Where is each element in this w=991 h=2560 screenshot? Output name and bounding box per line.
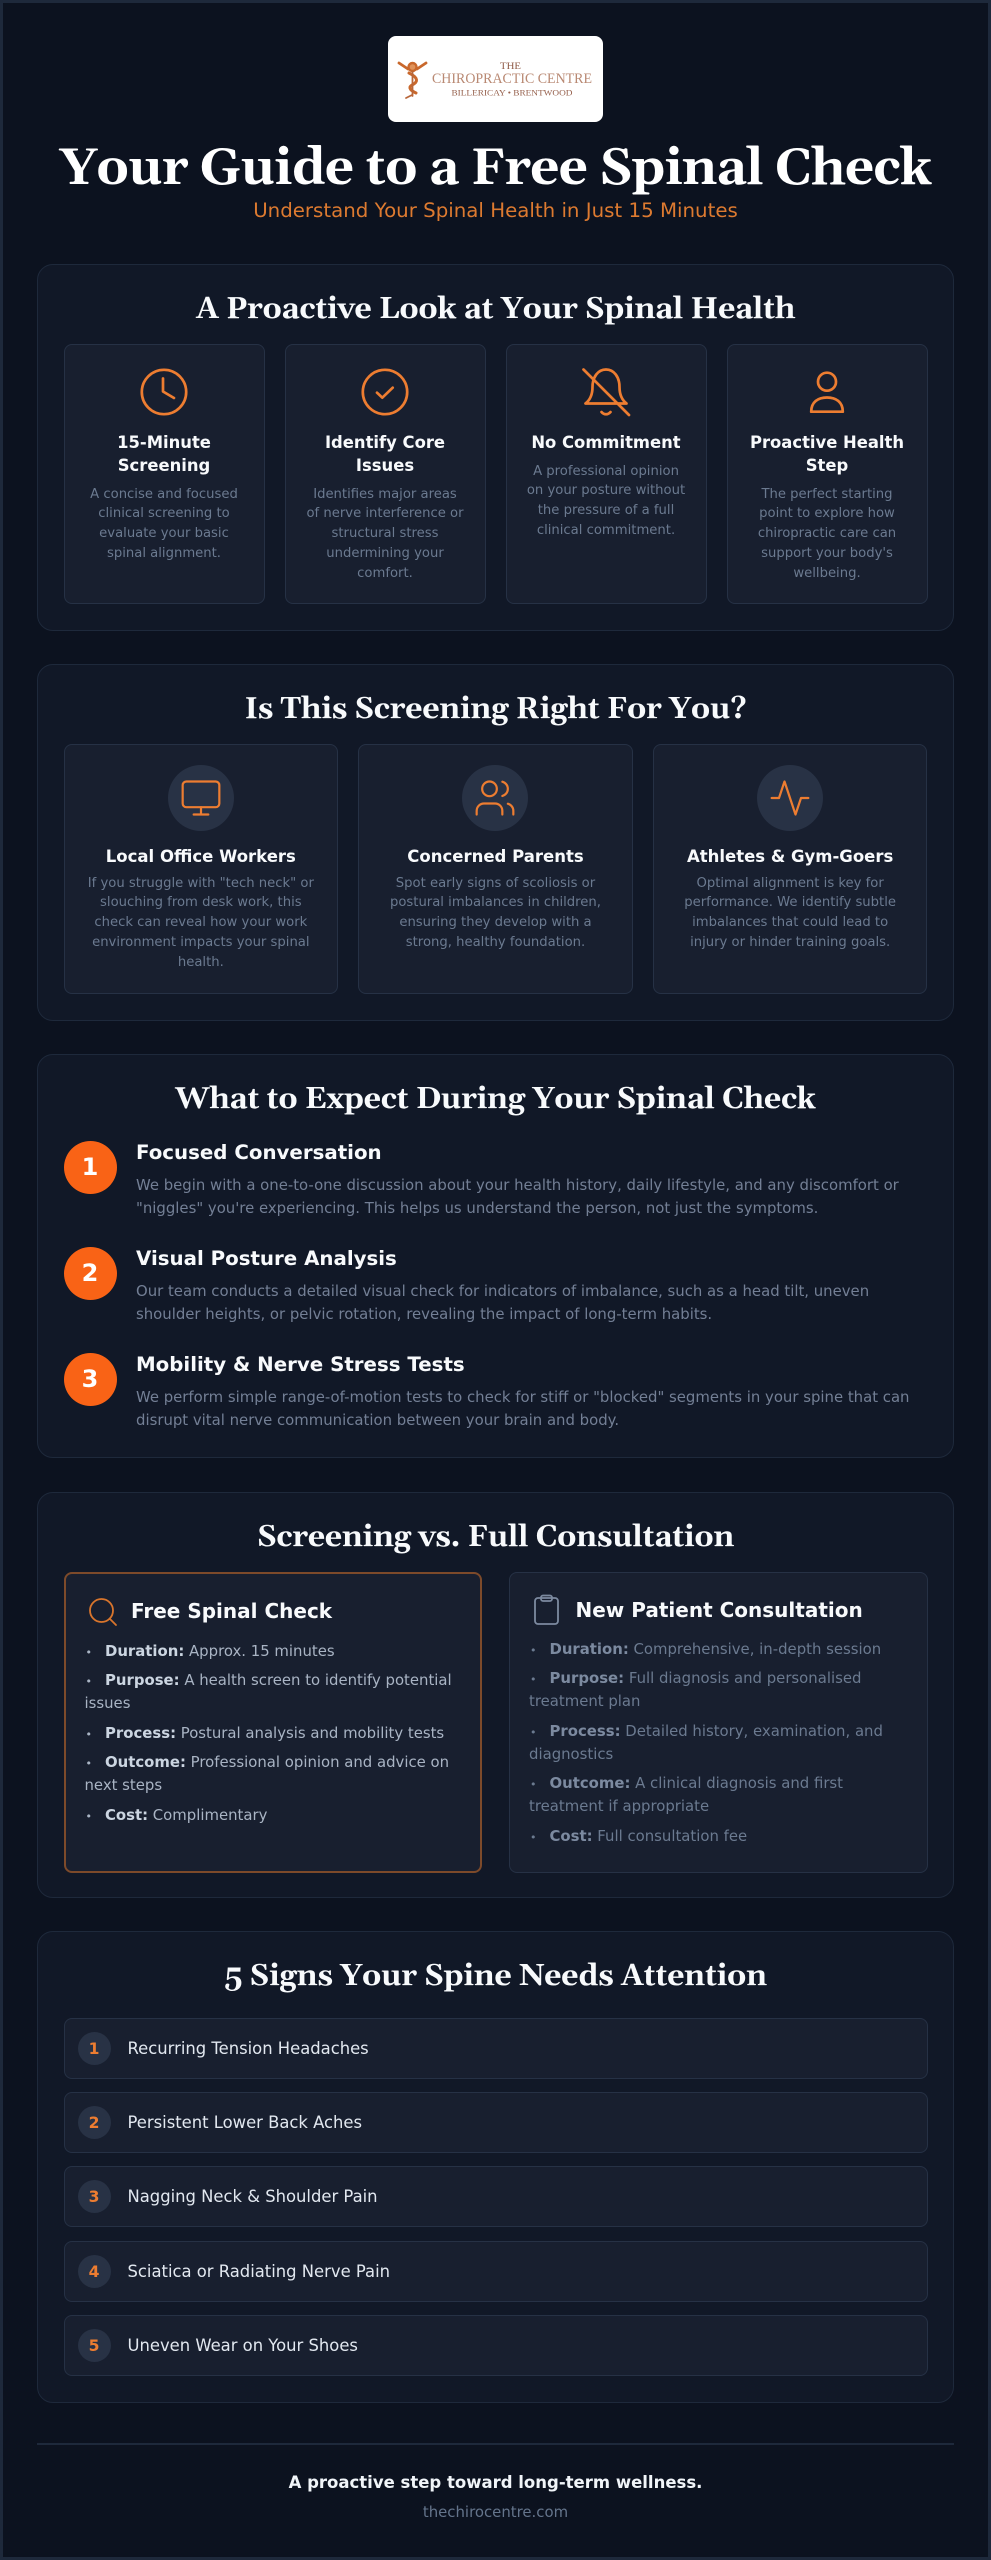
card: athletes and gym-goers [653,744,927,994]
card: concerned parents [358,744,633,994]
step 2: 2 [82,1259,98,1287]
card: no commitment: the pressure of a full [538,503,674,518]
comparison columns [64,1572,928,1873]
column: free spinal check: Process: Postural analysis and mobility tests [105,1724,444,1742]
icon: bell off [582,368,630,416]
card: 15-minute screening: 15-Minute [117,433,211,452]
card: identify core issues: of nerve interference or [306,506,464,521]
card: identify core issues: undermining your [326,546,444,561]
panel: screening vs consultation [37,1492,954,1898]
feature cards [64,344,928,604]
column: new patient consultation: Purpose: Full diagnosis and personalised [550,1669,861,1687]
panel: 5 signs [37,1931,954,2403]
icon: check circle [361,368,409,416]
heading: A Proactive Look at Your Spinal Health [196,291,795,329]
icon: clock [140,368,188,416]
sign 5 [64,2315,928,2376]
logo [388,36,603,122]
card: 15-minute screening: A concise and focused [90,486,238,502]
column: free spinal check: Purpose: A health screen to identify potential [105,1671,452,1689]
card: no commitment: on your posture without [527,483,685,498]
sign 2: Persistent Lower Back Aches [128,2113,362,2132]
sign 4: Sciatica or Radiating Nerve Pain [128,2262,390,2281]
card: local office workers: health. [178,955,224,970]
step 2 [64,1247,869,1323]
card: proactive health step: The perfect starting [761,486,893,502]
audience cards [64,744,927,994]
card: 15-minute screening: evaluate your basic [99,526,229,541]
column: free spinal check: Duration: Approx. 15 minutes [105,1642,335,1660]
sign 5: 5 [89,2337,99,2355]
step 1: "niggles" you're experiencing. This helps us understand the person, not just the symptoms. [136,1199,818,1217]
card: no commitment [506,344,706,604]
heading: What to Expect During Your Spinal Check [175,1081,816,1119]
column: new patient consultation: treatment if appropriate [529,1797,709,1815]
card: athletes and gym-goers: imbalances that could lead to [692,915,888,930]
step 3: disrupt vital nerve communication between your brain and body. [136,1411,619,1429]
panel: a proactive look [37,264,954,631]
card: concerned parents: postural imbalances in children, [390,895,601,910]
card: 15-minute screening: clinical screening to [98,506,230,521]
card: proactive health step: chiropractic care can [758,526,896,541]
column: free spinal check: issues [84,1694,130,1712]
card: proactive health step [726,344,928,604]
step 3: We perform simple range-of-motion tests to check for stiff or "blocked" segments in your spine that can [136,1388,910,1406]
card: athletes and gym-goers: performance. We identify subtle [684,895,896,910]
panel: is this screening right for you [37,664,954,1021]
card: local office workers: environment impacts your spinal [92,935,310,950]
card: local office workers: check can reveal how your work [94,915,307,930]
column: free spinal check: next steps [84,1776,162,1794]
card: no commitment: No Commitment [531,433,681,452]
logo: BILLERICAY • BRENTWOOD [452,88,572,98]
card: 15-minute screening [64,344,264,604]
sign 1: 1 [89,2040,99,2058]
card: athletes and gym-goers: injury or hinder training goals. [690,935,890,950]
sign 1 [64,2018,928,2079]
card: proactive health step: wellbeing. [793,566,861,581]
sign 2: 2 [89,2114,99,2132]
card: athletes and gym-goers: Athletes & Gym-Goers [687,846,893,866]
step 1: We begin with a one-to-one discussion about your health history, daily lifestyle, and any discomfort or [136,1176,899,1194]
card: proactive health step: support your body's [761,546,893,561]
icon: activity pulse [757,765,823,831]
sign 3: 3 [89,2188,99,2206]
card: identify core issues: structural stress [332,526,438,541]
step 1 [64,1141,899,1217]
card: proactive health step: Proactive Health [750,433,904,452]
card: no commitment: clinical commitment. [537,523,675,538]
card: concerned parents: strong, healthy foundation. [406,935,585,950]
card: identify core issues [284,344,486,604]
column: new patient consultation: diagnostics [529,1745,613,1763]
footer website: thechirocentre.com [423,2503,568,2521]
step 2: Visual Posture Analysis [136,1247,397,1270]
column: new patient consultation: treatment plan [529,1692,640,1710]
card: identify core issues: Issues [356,456,414,475]
card: 15-minute screening: spinal alignment. [107,546,221,561]
footer [37,2443,954,2533]
column: free spinal check: Free Spinal Check [131,1599,332,1623]
sign 4: 4 [89,2263,99,2281]
panel: what to expect [37,1054,954,1458]
column: free spinal check [64,1572,482,1873]
title: Your Guide to a Free Spinal Check [60,136,931,202]
sign 4 [64,2241,928,2302]
column: new patient consultation: Outcome: A clinical diagnosis and first [550,1774,843,1792]
column: free spinal check: Outcome: Professional opinion and advice on [105,1753,449,1771]
card: athletes and gym-goers: Optimal alignment is key for [696,876,884,890]
card: identify core issues: Identify Core [325,433,445,452]
step 3 [64,1353,910,1429]
card: proactive health step: Step [806,456,848,475]
column: new patient consultation: Duration: Comprehensive, in-depth session [550,1640,881,1658]
heading: Screening vs. Full Consultation [257,1519,734,1557]
heading: Is This Screening Right For You? [244,691,747,729]
sign 1: Recurring Tension Headaches [128,2039,369,2058]
column: free spinal check: Cost: Complimentary [105,1806,267,1824]
step 1: Focused Conversation [136,1141,382,1164]
icon: magnifier [89,1598,117,1626]
step 2: shoulder heights, or pelvic rotation, revealing the impact of long-term habits. [136,1305,712,1323]
step 2: Our team conducts a detailed visual check for indicators of imbalance, such as a head tilt, uneven [136,1282,869,1300]
icon: clipboard [534,1594,559,1625]
card: identify core issues: Identifies major areas [313,486,457,502]
sign 3: Nagging Neck & Shoulder Pain [128,2187,378,2206]
step 1: 1 [82,1153,98,1181]
logo: THE [500,61,522,71]
column: new patient consultation [509,1572,928,1873]
column: new patient consultation: Cost: Full consultation fee [550,1827,747,1845]
step 3: Mobility & Nerve Stress Tests [136,1353,465,1376]
sign 3 [64,2166,928,2227]
icon: user [810,371,844,413]
heading: 5 Signs Your Spine Needs Attention [224,1958,767,1996]
card: concerned parents: ensuring they develop with a [399,915,592,930]
card: no commitment: A professional opinion [533,464,679,478]
card: 15-minute screening: Screening [118,456,210,475]
icon: monitor [168,765,234,831]
card: local office workers: Local Office Workers [106,846,296,866]
footer tagline: A proactive step toward long-term wellness. [289,2473,702,2492]
subtitle: Understand Your Spinal Health in Just 15 Minutes [253,199,738,222]
icon: users [462,765,528,831]
card: concerned parents: Concerned Parents [407,846,584,866]
sign 5: Uneven Wear on Your Shoes [128,2336,358,2355]
column: new patient consultation: New Patient Consultation [576,1598,863,1622]
logo: CHIROPRACTIC CENTRE [432,71,592,87]
step 3: 3 [82,1365,98,1393]
column: new patient consultation: Process: Detailed history, examination, and [550,1722,883,1740]
card: local office workers: If you struggle with "tech neck" or [88,876,314,890]
card: local office workers [64,744,338,994]
sign 2 [64,2092,928,2153]
card: identify core issues: comfort. [357,566,413,581]
card: local office workers: slouching from desk work, this [100,895,302,910]
card: proactive health step: point to explore how [759,506,895,521]
card: concerned parents: Spot early signs of scoliosis or [396,876,595,890]
